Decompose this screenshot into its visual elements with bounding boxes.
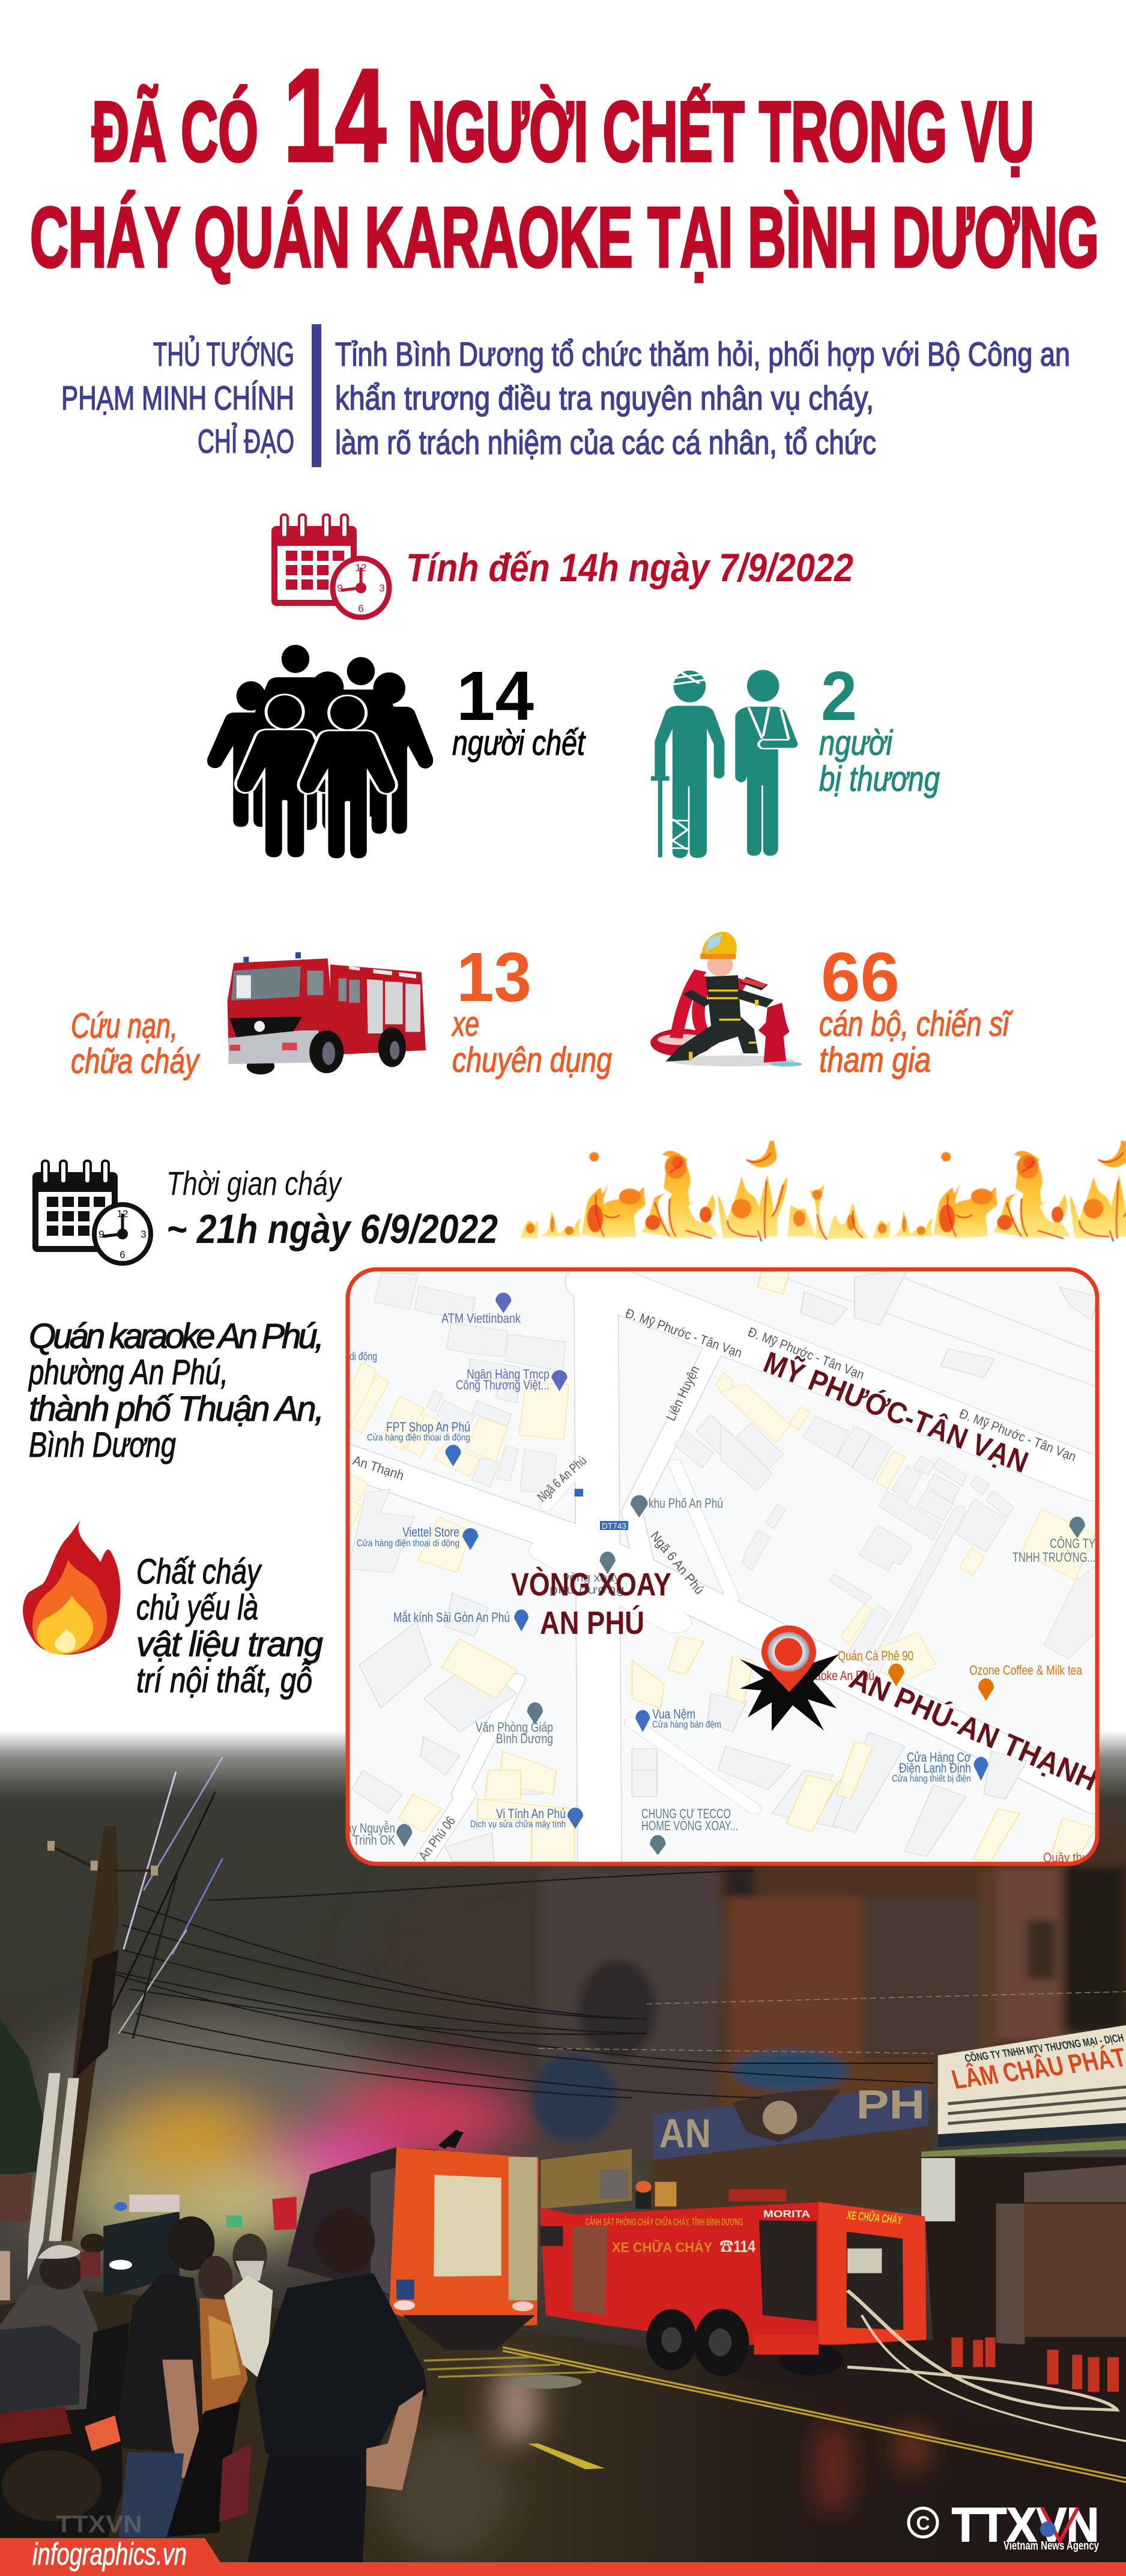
footer bar	[0, 2537, 1126, 2576]
icon: black calendar and clock	[32, 1161, 151, 1263]
map place labels: Cửa hàng thiết bị điện	[892, 1774, 971, 1784]
map place labels: Mắt kính Sài Gòn An Phú	[393, 1610, 510, 1625]
map place labels: HOME VÒNG XOAY...	[641, 1818, 738, 1833]
distant truck	[103, 2212, 180, 2298]
logo: TTXVN: TTXVN	[952, 2498, 1099, 2551]
road label: Mỹ Phước-Tân Vạn: MỸ PHƯỚC-TÂN VẠN	[759, 1345, 1033, 1480]
location text: Quán karaoke An Phú,	[29, 1317, 324, 1356]
roundabout label	[511, 1567, 671, 1641]
location text: phường An Phú,	[28, 1353, 228, 1392]
stat: injured: bị thương	[819, 760, 940, 799]
rescue label: Cứu nạn,	[71, 1006, 178, 1045]
building	[531, 1867, 1126, 2212]
man in black shirt	[248, 2209, 428, 2562]
icon: explosion burst	[740, 1654, 839, 1731]
logo: TTXVN: C	[916, 2512, 930, 2534]
overhead streak wires	[107, 1757, 223, 2039]
map place labels: Đ. Mỹ Phước - Tân Vạn	[623, 1305, 744, 1361]
fire time: Thời gian cháy	[166, 1164, 342, 1202]
map place labels: Đ. Mỹ Phước - Tân Vạn	[746, 1324, 867, 1382]
map place labels: Dịch vụ sửa chữa máy tính	[470, 1819, 566, 1830]
shop sign	[938, 2025, 1126, 2134]
fade to white	[0, 1723, 1126, 1798]
stat: vehicles: 13	[456, 938, 531, 1016]
stat: personnel: tham gia	[819, 1041, 931, 1080]
photo: fire scene: XE CHỮA CHÁY	[846, 2209, 904, 2227]
front fire truck	[540, 2202, 927, 2345]
road label: An Phú-An Thạnh: AN PHÚ-AN THẠNH	[845, 1661, 1103, 1797]
map place labels: DT743	[602, 1521, 626, 1531]
roundabout label: VÒNG XOAY	[511, 1567, 671, 1603]
map place labels: Quán Cà Phê 90	[838, 1648, 913, 1663]
map place labels: di động	[350, 1350, 377, 1362]
directive source: THỦ TƯỚNG	[153, 335, 294, 373]
map place labels: Quầy thu	[1043, 1850, 1088, 1865]
icon: red calendar and clock: 9	[337, 582, 343, 594]
map place labels: aoke An Phú	[815, 1668, 874, 1683]
motorbike rider	[0, 2234, 129, 2538]
rescue label	[71, 1006, 200, 1081]
location text: Bình Dương	[29, 1426, 176, 1465]
map place labels: Bình Dương	[496, 1731, 553, 1746]
stat: personnel: 66	[821, 938, 900, 1016]
icon: black calendar and clock: 6	[120, 1249, 126, 1260]
stat: personnel: cán bộ, chiến sĩ	[819, 1005, 1013, 1044]
man in white shirt	[224, 2234, 273, 2384]
stat: injured: 2	[821, 657, 857, 735]
wires	[115, 1870, 934, 2098]
photo: fire scene: PH	[856, 2082, 925, 2127]
site name: infographics.vn	[32, 2537, 187, 2572]
map place labels: Vua Nệm	[652, 1707, 695, 1722]
combustible material text: chủ yếu là	[136, 1588, 258, 1627]
stat: deaths: người chết	[452, 724, 586, 763]
map place labels: Công Thương Việt...	[456, 1377, 549, 1392]
hose	[847, 2290, 1126, 2441]
combustible material text: Chất cháy	[136, 1552, 262, 1591]
combustible material text	[136, 1552, 323, 1700]
photo: fire scene: XE CHỮA CHÁY	[612, 2239, 712, 2255]
buildings east	[721, 1383, 1097, 1681]
map place labels: khu Phố An Phú	[649, 1496, 723, 1511]
stat: deaths: 14	[456, 657, 534, 735]
prime minister directive	[61, 324, 1070, 467]
map place labels: Cửa hàng điện thoại di động	[367, 1433, 470, 1443]
rescue label: chữa cháy	[71, 1042, 200, 1081]
stat: vehicles: xe	[451, 1005, 479, 1044]
roundabout label: AN PHÚ	[540, 1605, 644, 1641]
flames band	[521, 1141, 1126, 1241]
as-of date: Tính đến 14h ngày 7/9/2022	[406, 545, 853, 590]
fire time	[166, 1164, 498, 1252]
bystanders	[0, 2209, 428, 2562]
fire fighters on truck	[635, 2181, 676, 2209]
map place labels: ay Nguyễn	[346, 1821, 395, 1836]
icon: red calendar and clock: 12	[356, 562, 366, 573]
combustible material text: vật liệu trang	[136, 1625, 323, 1664]
icon: red calendar and clock: 6	[358, 603, 364, 614]
photo: fire scene: CẢNH SÁT PHÒNG CHÁY CHỮA CHÁY, TỈNH BÌNH DƯƠNG	[586, 2216, 743, 2228]
map place labels: CHUNG CƯ TECCO	[641, 1806, 731, 1821]
map place labels: Cửa Hàng Cơ	[907, 1750, 971, 1765]
map place labels: Ngân Hàng Tmcp	[467, 1367, 549, 1382]
icon: location pin	[761, 1625, 816, 1692]
yellow signage	[540, 2148, 632, 2209]
icon: red calendar and clock	[271, 515, 389, 617]
icon: black calendar and clock: 12	[117, 1208, 128, 1220]
stat: injured	[819, 657, 940, 799]
photo: fire scene	[0, 1723, 1126, 2576]
stat: vehicles: chuyên dụng	[452, 1041, 612, 1080]
icon: black calendar and clock: 9	[98, 1229, 104, 1240]
map place labels: vòng xoay	[563, 1571, 620, 1585]
road	[0, 2290, 1126, 2576]
map place labels: Vi Tính An Phú	[496, 1806, 566, 1821]
pole	[56, 1826, 118, 2241]
map place labels: Ngã 6 An Phú	[534, 1453, 589, 1505]
map place labels: Cửa hàng bán đệm	[652, 1720, 721, 1730]
map place labels	[346, 1305, 1095, 1865]
map place labels: Cửa hàng điện thoại di động	[357, 1538, 459, 1549]
title: ĐÃ CÓ	[92, 84, 258, 180]
map place labels: Viettel Store	[402, 1525, 459, 1540]
map place labels: An Thạnh	[351, 1453, 406, 1483]
stat: personnel	[819, 938, 1013, 1080]
combustible material text: trí nội thất, gỗ	[136, 1661, 312, 1700]
fog and glow	[43, 1777, 1126, 2261]
man in polo	[118, 2216, 215, 2537]
stat: injured: người	[819, 724, 894, 763]
photo: fire scene: MORITA	[763, 2209, 810, 2220]
map place labels: Điện Lạnh Định	[899, 1761, 971, 1776]
buildings north-west	[348, 1273, 733, 1573]
rear fire truck	[287, 2147, 438, 2325]
extinguishers	[951, 2338, 1119, 2392]
map roads	[330, 1272, 1099, 1866]
icon: flame	[23, 1520, 121, 1655]
map place labels: ATM Viettinbank	[441, 1311, 521, 1326]
map place markers	[396, 1293, 1085, 1855]
location text	[28, 1317, 324, 1465]
map place labels: Đ. Mỹ Phước - Tân Vạn	[957, 1406, 1078, 1464]
icon: injured people	[651, 670, 798, 858]
map place labels: Liên Huyện	[663, 1363, 703, 1423]
map place labels: Ngã 6 An Phú	[647, 1528, 707, 1597]
icon: black calendar and clock: 3	[141, 1229, 147, 1240]
stat: vehicles	[451, 938, 612, 1080]
title	[30, 41, 1099, 285]
fire time: ~ 21h ngày 6/9/2022	[166, 1206, 498, 1252]
directive content: làm rõ trách nhiệm của các cá nhân, tổ chức	[335, 423, 876, 461]
title: 14	[283, 41, 386, 189]
map place labels: An Phú 06	[416, 1813, 458, 1863]
woman in floral shirt	[166, 2256, 248, 2537]
directive source: CHỈ ĐẠO	[198, 422, 294, 460]
photo: fire scene: AN	[659, 2111, 711, 2156]
directive source: PHẠM MINH CHÍNH	[61, 379, 294, 417]
map place labels: Trinh OK	[353, 1833, 395, 1848]
directive content: khẩn trương điều tra nguyên nhân vụ cháy,	[335, 379, 874, 417]
directive content	[335, 335, 1070, 461]
icon: firefighter with hydrant	[650, 932, 802, 1066]
map place labels: Văn Phòng Giáp	[476, 1720, 553, 1735]
watermark: TTXVN	[56, 2511, 142, 2538]
map panel	[330, 1268, 1103, 1866]
photo: fire scene: ☎114	[719, 2237, 755, 2256]
icon: red calendar and clock: 3	[379, 582, 385, 594]
icon: group of people (deaths)	[207, 645, 433, 858]
stat: deaths	[452, 657, 586, 763]
location text: thành phố Thuận An,	[29, 1389, 324, 1429]
icon: fire truck	[228, 952, 426, 1074]
directive source	[61, 335, 294, 460]
map place labels: phú dương	[549, 1583, 625, 1597]
map place labels: FPT Shop An Phú	[386, 1420, 470, 1435]
buildings south and north-east	[352, 1268, 1099, 1861]
map place labels: Ozone Coffee & Milk tea	[969, 1663, 1083, 1678]
map place labels: TNHH TRƯỜNG...	[1012, 1550, 1095, 1565]
map place labels: CÔNG TY	[1050, 1536, 1095, 1551]
